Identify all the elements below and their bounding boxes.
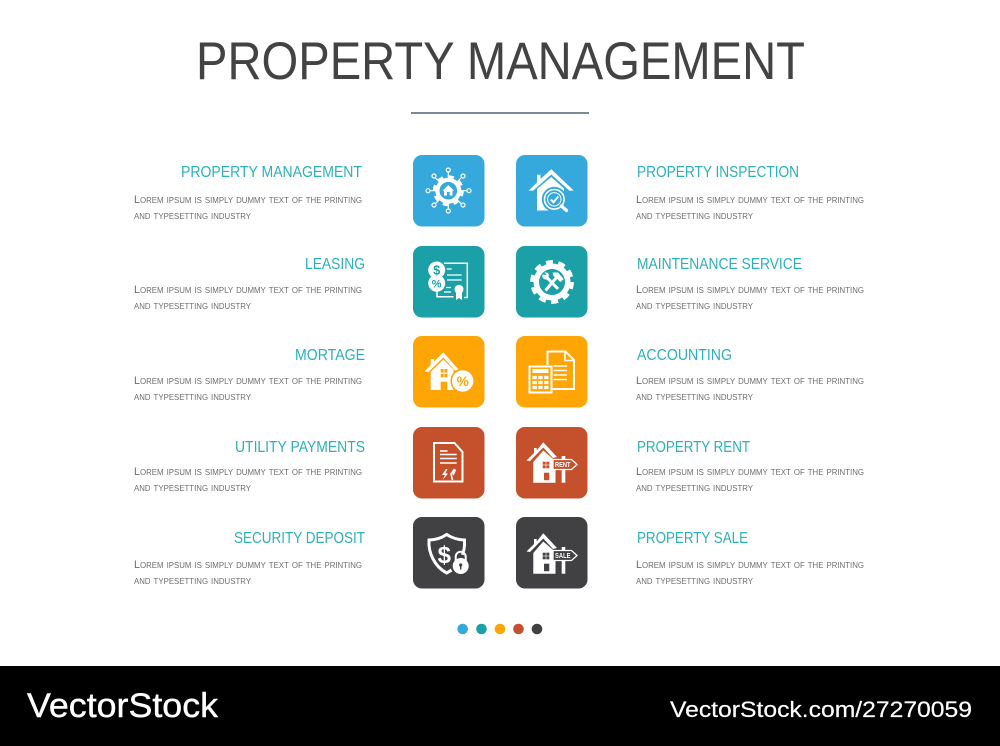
footer bar: [0, 666, 1000, 746]
footer logo: VectorStock: [27, 687, 219, 725]
description: and typesetting industry: [636, 482, 754, 494]
description: and typesetting industry: [636, 575, 754, 587]
icon: house with percent: [413, 336, 484, 408]
description: and typesetting industry: [636, 300, 754, 312]
description: Lorem ipsum is simply dummy text of the printing: [636, 194, 864, 206]
icon: house with percent: %: [456, 373, 469, 389]
icon: house with rent sign: [516, 427, 588, 498]
icon: utility bill: [413, 427, 484, 498]
description: [134, 194, 362, 222]
description: Lorem ipsum is simply dummy text of the printing: [636, 284, 864, 296]
heading: LEASING: [305, 256, 365, 273]
icon: calculator and document: [516, 336, 588, 408]
description: Lorem ipsum is simply dummy text of the printing: [134, 559, 362, 571]
heading: MORTAGE: [295, 347, 365, 364]
heading: PROPERTY RENT: [637, 439, 750, 456]
description: [636, 466, 864, 494]
text block: maintenance service: [636, 256, 864, 312]
icon: security shield with lock: $: [438, 542, 452, 569]
description: Lorem ipsum is simply dummy text of the printing: [134, 466, 362, 478]
description: Lorem ipsum is simply dummy text of the printing: [636, 559, 864, 571]
description: and typesetting industry: [134, 482, 252, 494]
footer url: VectorStock.com/27270059: [670, 697, 972, 722]
text block: leasing: [134, 256, 365, 312]
icon: house with sale sign: [516, 517, 588, 588]
description: and typesetting industry: [134, 575, 252, 587]
heading: PROPERTY INSPECTION: [637, 164, 799, 181]
description: [134, 375, 362, 403]
description: and typesetting industry: [636, 210, 754, 222]
description: and typesetting industry: [636, 391, 754, 403]
text block: property rent: [636, 439, 864, 494]
icon: house with sale sign: SALE: [555, 553, 571, 560]
icon: lease contract: %: [432, 278, 442, 290]
text block: property sale: [636, 530, 864, 587]
icon: maintenance gear with tools: [516, 246, 588, 318]
description: [134, 284, 362, 312]
heading: ACCOUNTING: [637, 347, 732, 364]
description: and typesetting industry: [134, 300, 252, 312]
description: Lorem ipsum is simply dummy text of the printing: [134, 375, 362, 387]
heading: MAINTENANCE SERVICE: [637, 256, 802, 273]
icon: house inspection magnifier: [516, 155, 588, 226]
description: [636, 284, 864, 312]
description: [134, 559, 362, 587]
text block: property inspection: [636, 164, 864, 222]
heading: PROPERTY MANAGEMENT: [181, 164, 362, 181]
icon: security shield with lock: [413, 517, 484, 588]
text block: utility payments: [134, 439, 365, 494]
description: Lorem ipsum is simply dummy text of the printing: [636, 375, 864, 387]
text block: property management: [134, 164, 362, 222]
description: and typesetting industry: [134, 391, 252, 403]
description: and typesetting industry: [134, 210, 252, 222]
icon: lease contract: [413, 246, 484, 318]
description: Lorem ipsum is simply dummy text of the printing: [134, 284, 362, 296]
text block: security deposit: [134, 530, 365, 587]
description: Lorem ipsum is simply dummy text of the printing: [636, 466, 864, 478]
description: [134, 466, 362, 494]
title: PROPERTY MANAGEMENT: [196, 32, 805, 91]
text block: accounting: [636, 347, 864, 403]
icon: house in gear network: [413, 155, 484, 226]
icon: lease contract: $: [433, 264, 440, 278]
pagination dots: [457, 624, 542, 634]
description: [636, 559, 864, 587]
description: [636, 375, 864, 403]
description: Lorem ipsum is simply dummy text of the printing: [134, 194, 362, 206]
heading: PROPERTY SALE: [637, 530, 748, 547]
heading: UTILITY PAYMENTS: [235, 439, 365, 456]
icon: house with rent sign: RENT: [555, 462, 571, 469]
description: [636, 194, 864, 222]
text block: mortage: [134, 347, 365, 403]
heading: SECURITY DEPOSIT: [234, 530, 365, 547]
